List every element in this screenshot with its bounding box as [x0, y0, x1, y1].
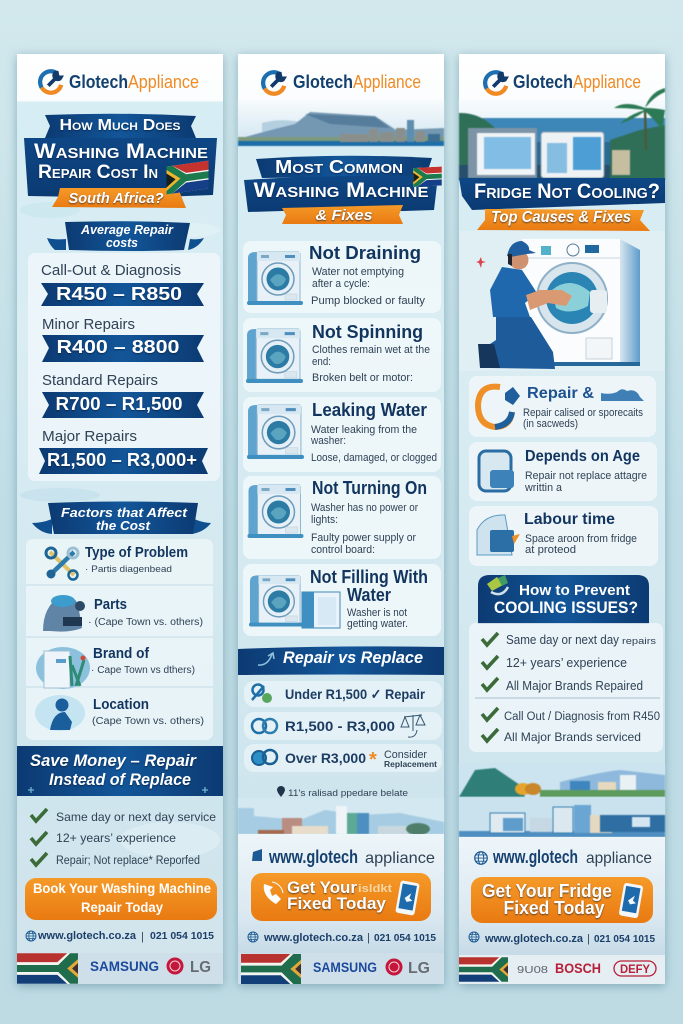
card: not filling with water: getting water. [347, 618, 408, 630]
logo: Glotech [293, 72, 353, 92]
factor: parts: Parts [94, 597, 127, 613]
card: depends on age: Depends on Age [525, 448, 640, 465]
price row: call-out: R450 – R850 [56, 284, 182, 304]
card: not draining: after a cycle: [312, 278, 370, 290]
card: depends on age: writtin a [524, 482, 563, 494]
factor: brand: · Cape Town vs dthers) [91, 665, 195, 676]
card: leaking water [243, 397, 441, 472]
title banner: Repair Cost In [38, 162, 158, 183]
contact line: www.glotech.co.za [263, 932, 364, 944]
band: save money: Save Money – Repair [30, 751, 197, 770]
logo: Glotech [513, 72, 573, 92]
card: labour time: at proteod [525, 544, 576, 556]
contact line: | [141, 931, 144, 943]
card: not turning on: Faulty power supply or [311, 532, 416, 544]
card: not filling with water: Washer is not [347, 607, 407, 619]
logo: Glotech [69, 72, 128, 92]
card: not turning on [243, 476, 441, 559]
button: book repair: Book Your Washing Machine [33, 880, 211, 896]
contact line: | [367, 932, 370, 944]
card: leaking water: washer: [310, 435, 346, 447]
card: leaking water: Water leaking from the [311, 424, 417, 436]
card: not spinning: Broken belt or motor: [312, 372, 413, 384]
card: repair prices [28, 253, 220, 481]
price row: major: R1,500 – R3,000+ [47, 450, 197, 470]
price row: call-out: Call-Out & Diagnosis [41, 262, 181, 279]
checklist card: All Major Brands serviced [504, 730, 641, 744]
price row: major [39, 428, 208, 474]
price row: standard: Standard Repairs [42, 372, 158, 389]
factor: type of problem [85, 545, 188, 575]
button: get fixed today [251, 873, 431, 921]
panel: most common washing machine problems [238, 54, 444, 984]
checklist: Same day or next day service [56, 810, 216, 824]
price row: standard [42, 372, 204, 418]
brand strip: LG [190, 959, 211, 976]
row: R1,500 - R3,000 [244, 712, 442, 740]
website headline: appliance [586, 850, 652, 867]
card: labour time: Labour time [524, 511, 615, 528]
factor: type of problem: Type of Problem [85, 545, 188, 561]
icon: parts [43, 595, 85, 632]
checklist card: 12+ years’ experience [506, 656, 627, 670]
logo: Appliance [573, 72, 641, 92]
checklist: 12+ years’ experience [56, 831, 176, 845]
title banner: How Much Does [60, 117, 180, 134]
heading: how to prevent: COOLING ISSUES? [494, 599, 638, 617]
brand strip [238, 953, 444, 984]
title banner: Washing Machine [254, 179, 428, 202]
title banner [24, 114, 217, 208]
checklist: Repair; Not replace* Reporfed [56, 855, 200, 867]
brand strip [459, 955, 665, 984]
icon: crossed wrenches [46, 548, 78, 580]
checklist card: Call Out / Diagnosis from R450 [504, 711, 660, 723]
card: not draining [243, 241, 441, 313]
price row: call-out [41, 262, 204, 306]
price row: minor: Minor Repairs [42, 316, 135, 333]
title banner [244, 156, 442, 224]
title banner: Most Common [275, 157, 403, 177]
card: repair and parts: Repair calised or sporecaits [523, 407, 643, 419]
title banner: South Africa? [68, 191, 164, 207]
row: over R3,000: Consider [384, 749, 427, 761]
banner: average repair costs [47, 221, 204, 251]
factor: parts [88, 597, 203, 628]
title banner [459, 178, 665, 231]
card: not turning on: Washer has no power or [311, 502, 418, 514]
card: not draining: Water not emptying [312, 266, 404, 278]
contact line: 021 054 1015 [150, 930, 214, 942]
card: labour time [469, 506, 658, 566]
logo: Appliance [128, 72, 199, 92]
factor: parts: · (Cape Town vs. others) [88, 617, 203, 628]
icon: fridge and plants [36, 647, 90, 689]
banner: average repair costs: Average Repair [80, 223, 174, 237]
website headline [252, 847, 435, 867]
card: depends on age [469, 442, 657, 501]
card: leaking water: Leaking Water [312, 400, 427, 420]
website headline [475, 847, 652, 867]
banner: factors [32, 502, 211, 534]
card: not spinning: end: [312, 356, 331, 368]
row: over R3,000: Over R3,000 [285, 750, 366, 766]
button: book repair [25, 878, 217, 920]
card: repair and parts [469, 376, 656, 437]
brand strip: 9U08 [517, 965, 549, 976]
card: not turning on: Not Turning On [312, 478, 427, 498]
card: repair and parts: (in sacweds) [523, 418, 578, 430]
factor: location: (Cape Town vs. others) [92, 716, 204, 727]
contact line: | [587, 933, 590, 945]
footer area [238, 834, 444, 953]
panel: fridge not cooling [459, 54, 665, 984]
footer area [459, 837, 665, 955]
price row: minor: R400 – 8800 [56, 337, 180, 357]
contact line: www.glotech.co.za [37, 930, 137, 942]
washer [522, 239, 640, 366]
checklist [31, 809, 216, 867]
contact line: www.glotech.co.za [484, 933, 584, 945]
heading: how to prevent [478, 575, 649, 624]
factor: location: Location [93, 697, 149, 713]
price row: standard: R700 – R1,500 [56, 394, 182, 414]
contact line [248, 932, 436, 944]
title banner: & Fixes [316, 207, 372, 224]
row: over R3,000: * [369, 749, 377, 771]
card: not filling with water: Water [347, 585, 391, 605]
button: get fixed today: Get Your [287, 878, 357, 897]
heading: how to prevent: How to Prevent [519, 582, 630, 599]
band: repair vs replace: Repair vs Replace [283, 648, 423, 667]
card: not turning on: control board: [311, 544, 375, 556]
title banner: Washing Machine [34, 140, 208, 163]
panel: washing machine repair cost [17, 54, 223, 984]
banner: factors: Factors that Affect [61, 505, 188, 520]
band: save money: Instead of Replace [49, 770, 191, 789]
brand strip: SAMSUNG [90, 958, 159, 974]
card: not spinning: Not Spinning [312, 322, 423, 342]
card: labour time: Space aroon from fridge [525, 533, 637, 545]
card: depends on age: Repair not replace attagre [525, 470, 647, 482]
illustration: city buildings [238, 798, 444, 835]
card: repair and parts: Repair & [527, 385, 594, 402]
logo [40, 71, 199, 93]
row: R1,500 - R3,000: R1,500 - R3,000 [285, 718, 395, 734]
website headline: appliance [365, 850, 435, 867]
factor: brand: Brand of [93, 646, 149, 662]
card: not spinning: Clothes remain wet at the [312, 344, 430, 356]
button: get your fridge fixed [471, 877, 653, 923]
checklist card: repairs [622, 636, 657, 646]
button: get fixed today: Fixed Today [287, 894, 387, 913]
website headline: www.glotech [492, 847, 578, 867]
technician [478, 241, 572, 369]
brand strip: LG [408, 960, 430, 977]
row: under R1,500: Under R1,500 ✓ Repair [285, 686, 425, 702]
contact line: 021 054 1015 [594, 933, 655, 945]
factor: brand [91, 646, 195, 676]
brand strip [17, 953, 223, 984]
card: cost factors [26, 539, 213, 740]
illustration: coast and appliance screens [459, 88, 665, 180]
card: not turning on: lights: [311, 514, 338, 526]
brand strip: DEFY [620, 964, 650, 976]
logo: Appliance [353, 72, 421, 92]
contact line [469, 932, 655, 945]
card: not spinning [243, 318, 441, 392]
logo [263, 72, 421, 94]
illustration: technician repairing washer [476, 239, 640, 369]
checklist card: Same day or next day [506, 633, 620, 647]
contact line: 021 054 1015 [374, 932, 436, 944]
row: under R1,500 [244, 681, 442, 707]
brand strip: BOSCH [555, 960, 601, 976]
band: save money [17, 746, 223, 796]
icon: location technician [35, 695, 85, 731]
title banner: Top Causes & Fixes [491, 209, 631, 226]
banner: factors: the Cost [96, 518, 151, 533]
card: not draining: Not Draining [309, 243, 421, 263]
factor: location [92, 697, 204, 727]
contact line [26, 930, 214, 943]
button: get your fridge fixed: Fixed Today [504, 898, 604, 918]
card: leaking water: Loose, damaged, or clogged [311, 452, 437, 464]
row: over R3,000 [244, 744, 442, 772]
row: over R3,000: Replacement [384, 760, 437, 769]
website headline: www.glotech [268, 847, 358, 867]
factor: type of problem: · Partis diagenbead [85, 564, 172, 575]
price row: minor [42, 316, 204, 362]
card: not filling with water: Not Filling With [310, 567, 428, 587]
button: book repair: Repair Today [81, 899, 163, 915]
location note: 11's ralisad ppedare belate [288, 788, 408, 799]
title banner: Fridge Not Cooling? [474, 180, 660, 203]
logo [485, 72, 641, 94]
button: get your fridge fixed: Get Your Fridge [482, 881, 612, 901]
button: get fixed today: isldkt [358, 883, 392, 895]
illustration: appliance showroom [459, 797, 665, 837]
banner: average repair costs: costs [106, 236, 138, 250]
card: not draining: Pump blocked or faulty [311, 295, 426, 307]
band: repair vs replace [238, 646, 444, 675]
checklist card [469, 623, 663, 752]
checklist card: All Major Brands Repaired [506, 679, 643, 693]
illustration: landscape and plants [459, 763, 665, 797]
card: not filling with water [243, 564, 441, 636]
illustration: Cape Town skyline [238, 100, 444, 146]
price row: major: Major Repairs [42, 428, 137, 445]
brand strip: SAMSUNG [313, 960, 377, 975]
